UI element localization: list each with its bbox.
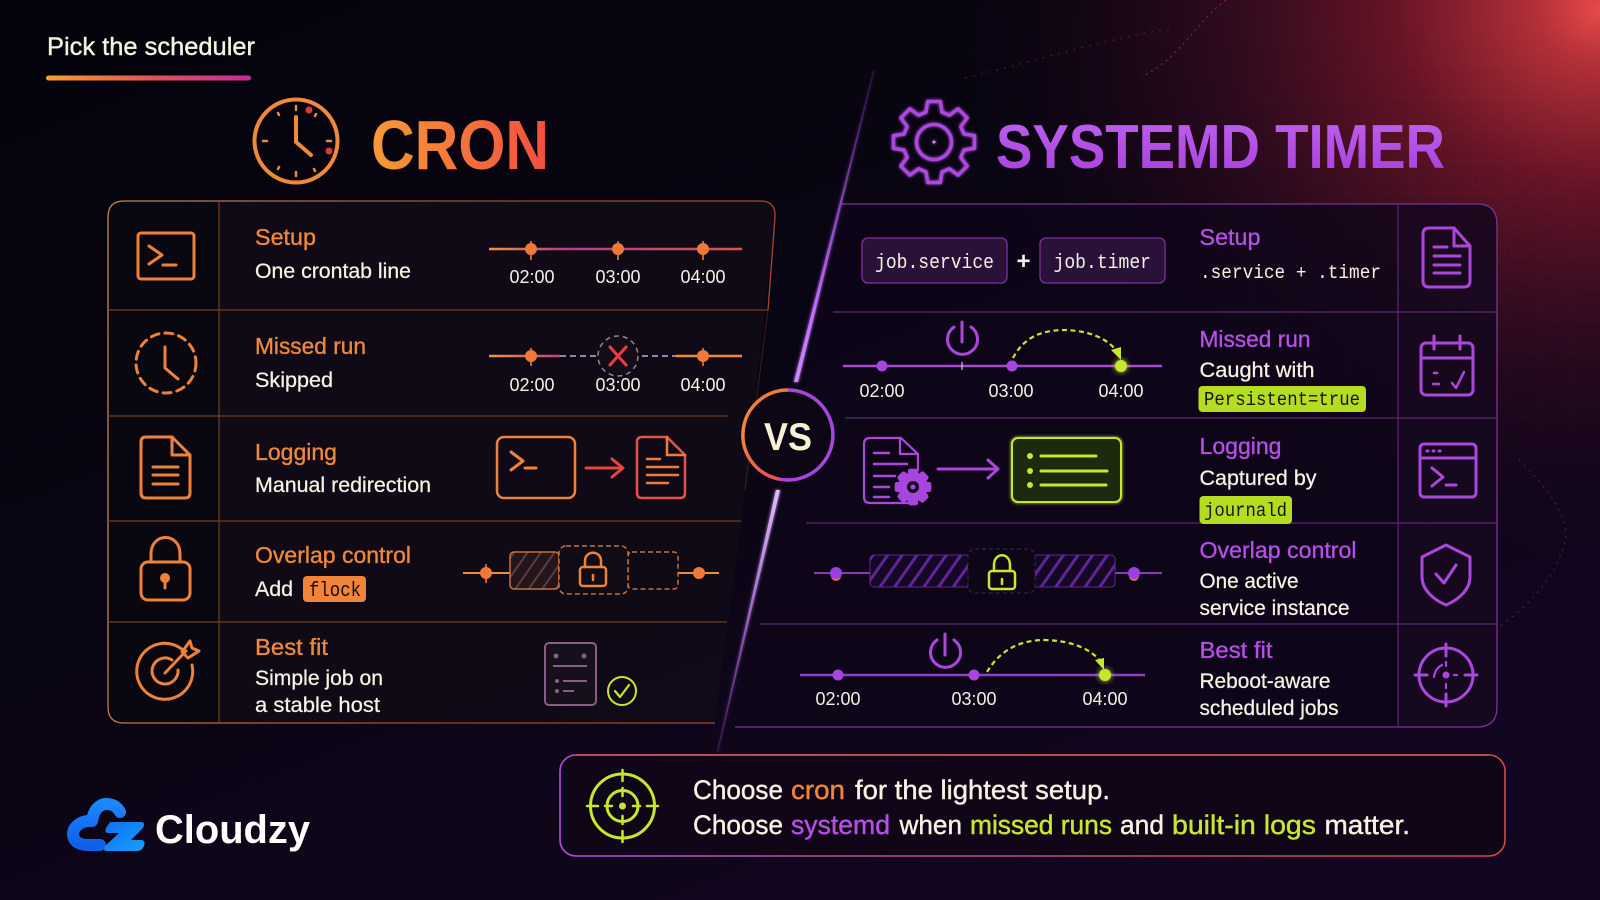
diagram: reboot-aware timeline: 03:00 [951,689,997,709]
row: logging: Logging [255,439,337,465]
callout text: Choose [693,810,783,840]
callout text: missed runs [970,810,1112,840]
heading: CRON: CRON [371,106,549,184]
row: setup [255,224,411,283]
diagram: service and timer chips [862,238,1165,283]
row: missed run: Missed run [1200,326,1310,352]
diagram: service to journal [864,438,1121,503]
timeline: cron missed run [489,336,742,395]
callout text: for the lightest setup. [855,775,1110,805]
logo: Cloudzy: Cloudzy [155,808,311,852]
row: missed run: Missed run [255,333,366,359]
row: best fit: scheduled jobs [1200,697,1338,720]
row: setup: One crontab line [255,260,411,283]
diagram: reboot-aware timeline [800,634,1145,709]
row: missed run: Persistent=true [1204,389,1360,411]
diagram: service and timer chips: + [1016,248,1031,275]
row: overlap control: Overlap control [255,542,411,568]
diagram: service and timer chips: job.service [875,252,994,275]
callout text: when [899,810,962,840]
row: overlap control: flock [309,580,361,603]
timeline: cron missed run: 02:00 [509,375,555,395]
timeline: cron missed run: 03:00 [595,375,641,395]
icon: cron clock [254,100,338,182]
row: missed run: Skipped [255,369,333,392]
row: setup: Setup [1200,224,1260,250]
row: best fit: Simple job on [255,667,383,690]
row: best fit [255,634,383,717]
title underline [46,76,251,80]
row: overlap control [255,542,411,603]
diagram: persistent catch-up timeline: 04:00 [1098,381,1144,401]
row: best fit: Best fit [255,634,329,660]
timeline: cron setup: 04:00 [680,267,726,287]
diagram: stable host [545,643,636,705]
panel: systemd timer comparison [735,204,1497,727]
row: best fit: Best fit [1200,637,1273,663]
diagram: reboot-aware timeline: 02:00 [815,689,861,709]
icon: systemd gear [894,102,974,182]
row: logging: Logging [1200,433,1282,459]
diagram: flock lock [463,546,719,594]
diagram: persistent catch-up timeline: 02:00 [859,381,905,401]
badge: VS [743,390,833,480]
callout text: built-in logs [1172,810,1316,840]
icon: unit file [1423,228,1470,287]
panel: cron comparison [108,201,775,723]
row: overlap control: One active [1200,570,1298,593]
row: overlap control: Add [255,578,293,601]
icon: shield check [1422,545,1470,605]
row: best fit: Reboot-aware [1200,670,1330,693]
divider: diagonal glow line [717,70,874,752]
timeline: cron setup: 03:00 [595,267,641,287]
diagram: persistent catch-up timeline [843,322,1162,401]
callout text: Choose [693,775,783,805]
row: logging [1200,433,1317,524]
row: missed run: Caught with [1200,359,1314,382]
callout text: cron [791,775,845,805]
diagram: persistent catch-up timeline: 03:00 [988,381,1034,401]
timeline: cron setup [489,241,742,287]
icon: crosshair [1415,644,1477,706]
diagram: service and timer chips: job.timer [1054,252,1151,275]
diagram: reboot-aware timeline: 04:00 [1082,689,1128,709]
callout text: and [1120,810,1164,840]
diagram: terminal to file [497,437,685,498]
row: best fit: a stable host [255,694,380,717]
logo: Cloudzy [73,804,311,852]
icon: dashed clock [136,333,196,393]
icon: calendar [1421,336,1473,395]
row: missed run [255,333,366,392]
row: logging: journald [1204,500,1287,522]
diagram: one active instance [814,549,1162,593]
row: overlap control: service instance [1200,597,1350,620]
badge: VS: VS [764,416,812,459]
callout: recommendation [560,755,1505,856]
timeline: cron missed run: 04:00 [680,375,726,395]
icon: terminal prompt [138,233,194,279]
row: missed run [1198,326,1366,412]
row: setup [1200,224,1381,284]
row: best fit [1200,637,1338,720]
row: setup: .service + .timer [1200,262,1381,284]
icon: log file [141,437,190,498]
page title: Pick the scheduler [47,33,255,61]
icon: lime target [587,770,658,842]
row: setup: Setup [255,224,316,250]
icon: target with arrow [137,641,199,699]
row: logging: Captured by [1200,467,1317,490]
icon: padlock [141,538,190,600]
callout text [693,775,1410,840]
row: logging: Manual redirection [255,474,431,497]
row: overlap control: Overlap control [1200,537,1356,563]
heading: SYSTEMD TIMER: SYSTEMD TIMER [996,113,1445,182]
row: logging [255,439,431,497]
callout text: systemd [791,810,890,840]
icon: terminal window [1420,444,1476,497]
timeline: cron setup: 02:00 [509,267,555,287]
row: overlap control [1200,537,1356,620]
callout text: matter. [1324,810,1410,840]
